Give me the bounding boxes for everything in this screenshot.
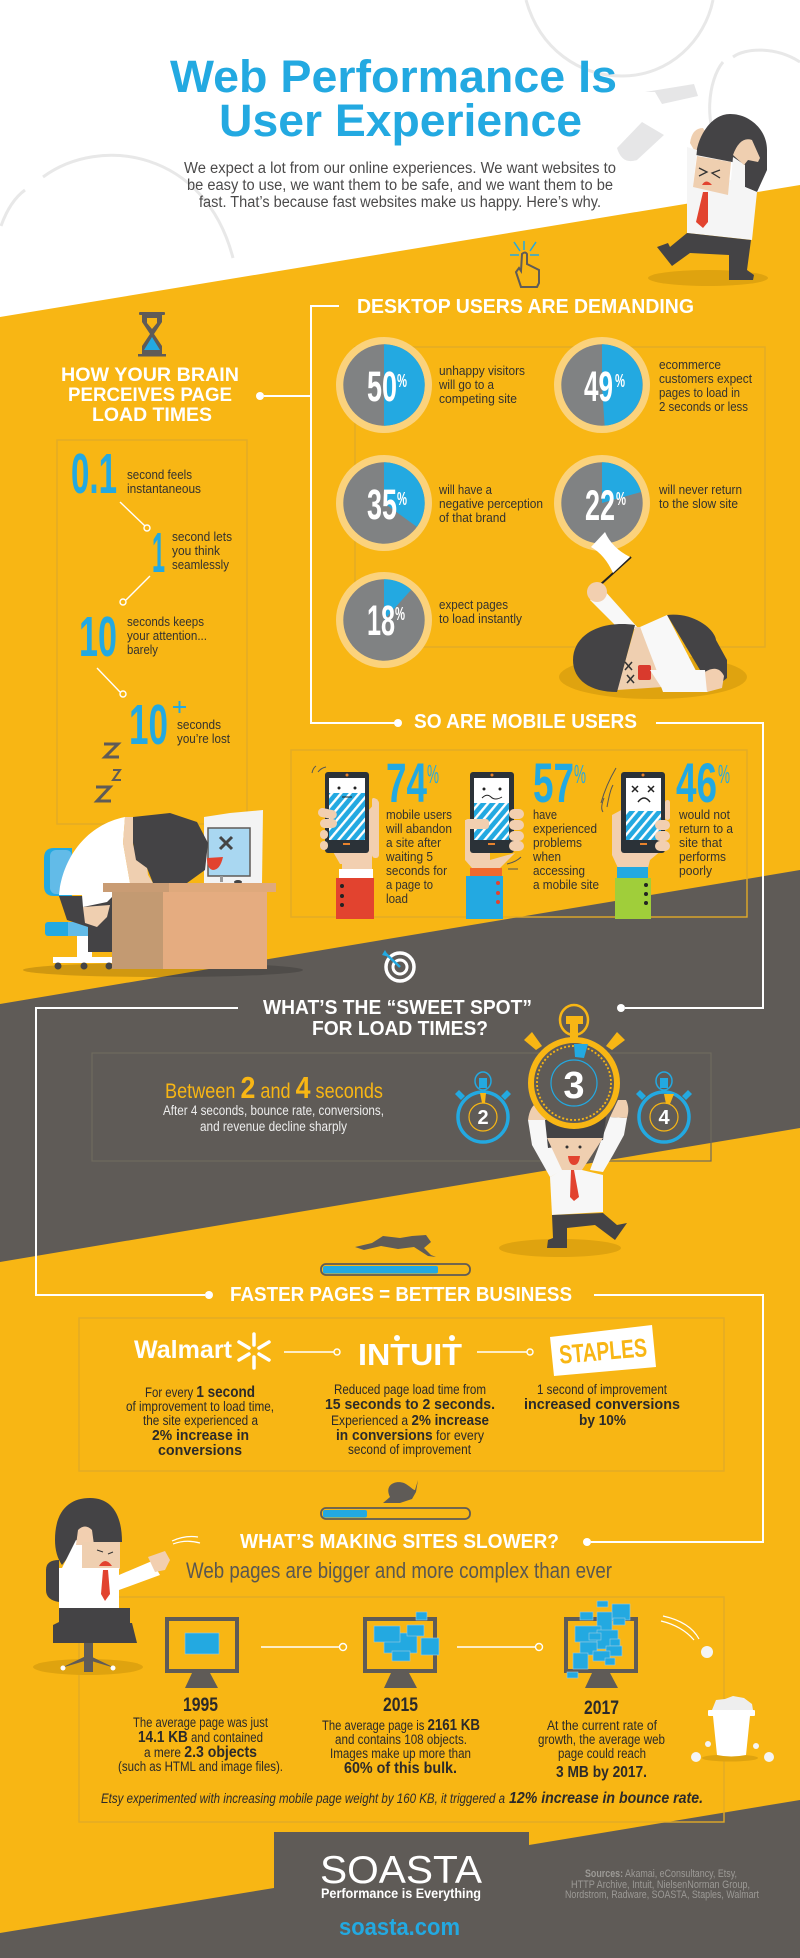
stat: 35 percent: negative perception	[439, 496, 543, 511]
icon: stopwatch 4	[636, 1072, 692, 1142]
text: Etsy note: 12% increase in bounce rate.	[509, 1790, 703, 1807]
callout: between 2 and 4 seconds: Between 2 and 4 seconds	[165, 1070, 383, 1105]
logo: Staples	[550, 1325, 656, 1376]
text: Etsy note: Etsy experimented with increasing mobile page weight by 160 KB, it triggered a	[101, 1791, 505, 1806]
text: after 4 seconds: After 4 seconds, bounce rate, conversions,	[163, 1103, 384, 1118]
stat: 46 percent: would not	[678, 808, 730, 822]
stat: 57 percent: experienced	[533, 822, 597, 836]
stat: 57 percent: problems	[533, 836, 582, 850]
logo: Walmart	[134, 1334, 340, 1368]
stat: 49 percent	[554, 337, 752, 433]
stat: 49 percent: ecommerce	[659, 357, 721, 372]
stat: 74 percent: load	[386, 892, 408, 906]
heading: how your brain perceives: HOW YOUR BRAIN	[61, 365, 239, 386]
text: 2015 details: 60% of this bulk.	[344, 1760, 457, 1777]
icon: stopwatch 2: 2	[477, 1107, 489, 1129]
logo: Intuit: INTUIT	[358, 1337, 462, 1372]
icon: clicking hand	[510, 241, 539, 287]
stat: 35 percent: of that brand	[439, 510, 506, 525]
connector lines	[36, 306, 763, 1546]
stat: 35 percent: %	[397, 489, 407, 509]
heading: sweet spot	[263, 997, 532, 1040]
panel: load time perception	[57, 440, 247, 824]
heading: so are mobile users: SO ARE MOBILE USERS	[414, 711, 637, 733]
character: man holding stopwatch	[499, 1100, 628, 1257]
stat: 50 percent: will go to a	[438, 377, 495, 392]
panel: desktop stats	[336, 337, 765, 668]
stat: 57 percent	[532, 751, 599, 892]
stat: 57 percent: 57	[533, 751, 574, 814]
heading: how your brain perceives	[61, 365, 239, 426]
text: 1995 details	[118, 1715, 283, 1774]
text: Intuit result: in conversions for every	[336, 1427, 484, 1444]
text: 1995 details: The average page was just	[133, 1715, 268, 1730]
stat: 0.1 second: second feels	[127, 467, 192, 482]
text: Walmart result: For every 1 second	[145, 1384, 255, 1401]
stat: 74 percent: %	[427, 759, 439, 789]
stat: 10 seconds: 10	[79, 605, 117, 669]
stat: 35 percent	[336, 455, 543, 551]
heading: what's making sites slower: WHAT’S MAKING SITES SLOWER?	[240, 1531, 559, 1553]
decorative arcs and paper	[1, 0, 800, 258]
stat: 22 percent: to the slow site	[659, 496, 738, 511]
heading: how your brain perceives: PERCEIVES PAGE	[68, 385, 232, 406]
stat: 74 percent: will abandon	[385, 822, 452, 836]
text: 2015 details: Images make up more than	[330, 1746, 471, 1761]
stat: 49 percent: pages to load in	[659, 385, 740, 400]
phone: user 2	[465, 772, 524, 919]
stat: 57 percent: have	[533, 808, 557, 822]
stat: 46 percent	[676, 751, 733, 878]
stat: 49 percent: 2 seconds or less	[659, 399, 748, 414]
icon: stopwatch 4: 4	[658, 1107, 670, 1129]
monitor: 1995	[167, 1619, 237, 1688]
intro text: We expect a lot from our online experiences. We want websites to	[184, 160, 616, 177]
heading: faster pages: FASTER PAGES = BETTER BUSINESS	[230, 1284, 572, 1306]
text: 2015 details: and contains 108 objects.	[335, 1732, 467, 1747]
intro text: fast. That’s because fast websites make us happy. Here’s why.	[199, 194, 601, 211]
text: 1995 details: a mere 2.3 objects	[144, 1744, 257, 1761]
text: after 4 seconds: and revenue decline sharply	[200, 1119, 347, 1134]
stat: 46 percent: 46	[676, 751, 717, 814]
text: Staples result: 1 second of improvement	[537, 1382, 667, 1397]
sources: HTTP Archive, Intuit, NielsenNorman Group,	[571, 1879, 750, 1891]
text: Intuit result	[325, 1382, 495, 1457]
character: frustrated businessman	[648, 114, 768, 286]
stat: 10+ seconds	[129, 693, 230, 757]
stat: 46 percent: poorly	[679, 864, 713, 878]
stat: 18 percent	[336, 572, 522, 668]
stat: 10 seconds: your attention...	[127, 628, 207, 643]
stat: 46 percent: return to a	[679, 822, 733, 836]
text: 2017 details: page could reach	[558, 1746, 646, 1761]
text: 2015 details	[322, 1717, 480, 1777]
stat: 49 percent: 49	[584, 363, 613, 411]
stat: 10+ seconds: 10	[129, 693, 168, 757]
text: 1995 details: 14.1 KB and contained	[138, 1729, 263, 1746]
text: Staples result	[524, 1382, 680, 1429]
icon: hourglass	[138, 312, 166, 356]
stat: 1 second: seamlessly	[172, 557, 229, 572]
subheading: web pages bigger: Web pages are bigger and more complex than ever	[186, 1558, 612, 1583]
stat: 10+ seconds: you’re lost	[177, 731, 230, 746]
stat: 10 seconds	[79, 605, 207, 697]
logo: SOASTA: SOASTA	[320, 1849, 482, 1892]
stat: 22 percent: 22	[585, 482, 615, 530]
year: 2015: 2015	[383, 1695, 418, 1716]
text: 2017 details: growth, the average web	[538, 1732, 665, 1747]
stat: 74 percent: 74	[386, 751, 427, 814]
stat: 35 percent: 35	[367, 481, 397, 529]
text: Staples result: by 10%	[579, 1412, 626, 1429]
stat: 49 percent: %	[615, 371, 625, 391]
stat: 50 percent: unhappy visitors	[439, 363, 525, 378]
stat: 18 percent: expect pages	[439, 597, 508, 612]
monitor: 2015	[365, 1612, 439, 1688]
text: Intuit result: Experienced a 2% increase	[331, 1412, 489, 1429]
icon: large stopwatch 3: 3	[563, 1065, 585, 1107]
logo: Staples: STAPLES	[558, 1332, 648, 1370]
logo: Walmart: Walmart	[134, 1336, 233, 1364]
text: Walmart result: of improvement to load time,	[126, 1399, 274, 1414]
stat: 50 percent	[336, 337, 525, 433]
icon: target with dart	[382, 950, 414, 981]
progress bar: fast	[321, 1264, 470, 1275]
text: Intuit result: Reduced page load time from	[334, 1382, 486, 1397]
character: worried office worker	[33, 1498, 200, 1675]
heading: how your brain perceives: LOAD TIMES	[92, 405, 212, 426]
monitor: 2017	[566, 1601, 636, 1688]
text: Intuit result: 15 seconds to 2 seconds.	[325, 1396, 495, 1413]
stat: 1 second: you think	[172, 543, 220, 558]
text: 2017 details: At the current rate of	[547, 1718, 657, 1733]
text: Walmart result: 2% increase in	[152, 1427, 249, 1444]
title	[170, 51, 617, 146]
stat: 74 percent: a site after	[386, 836, 441, 850]
title: Web Performance Is	[170, 51, 617, 102]
panel: better business	[79, 1318, 724, 1471]
stat: 10 seconds: barely	[127, 642, 158, 657]
intro text: be easy to use, we want them to be safe, and we want them to be	[187, 177, 613, 194]
stat: 0.1 second: 0.1	[71, 442, 117, 506]
year: 1995: 1995	[183, 1695, 218, 1716]
character: sleeping at desk	[23, 810, 303, 977]
illustration: crumpled paper and bin	[661, 1616, 774, 1762]
stat: 74 percent: mobile users	[386, 808, 452, 822]
stat: 22 percent	[554, 455, 742, 551]
stat: 46 percent: site that	[679, 836, 723, 850]
stat: 0.1 second	[71, 442, 201, 531]
link: soasta.com: soasta.com	[339, 1914, 460, 1941]
stat: 1 second: 1	[152, 521, 165, 585]
phone: user 1	[312, 766, 379, 919]
stat: 74 percent: seconds for	[386, 864, 447, 878]
stat: 46 percent: %	[718, 759, 730, 789]
stat: 57 percent: a mobile site	[533, 878, 599, 892]
text: 2015 details: The average page is 2161 KB	[322, 1717, 480, 1734]
stat: 57 percent: when	[532, 850, 561, 864]
text: Walmart result: the site experienced a	[143, 1413, 258, 1428]
icon: stopwatch 2	[455, 1072, 511, 1142]
text: after 4 seconds	[163, 1103, 384, 1134]
intro text	[184, 160, 616, 211]
text: Walmart result: conversions	[158, 1442, 242, 1459]
stat: 46 percent: performs	[679, 850, 726, 864]
text: Intuit result: second of improvement	[348, 1442, 471, 1457]
phone: user 3	[601, 768, 670, 919]
stat: 57 percent: accessing	[533, 864, 585, 878]
panel: mobile stats	[291, 750, 747, 919]
panel: page growth	[79, 1597, 724, 1822]
icon: sleep z letters	[96, 744, 121, 801]
stat: 22 percent: will never return	[658, 482, 742, 497]
year: 2017: 2017	[584, 1698, 619, 1719]
heading: desktop users: DESKTOP USERS ARE DEMANDING	[357, 296, 694, 318]
text: Etsy note	[101, 1790, 703, 1807]
logo: SOASTA: Performance is Everything	[321, 1885, 481, 1901]
stat: 22 percent: %	[616, 489, 626, 509]
stat: 50 percent: competing site	[439, 391, 517, 406]
stat: 74 percent: waiting 5	[385, 850, 433, 864]
sources: Sources: Akamai, eConsultancy, Etsy,	[585, 1868, 737, 1880]
progress bar: slow	[321, 1508, 470, 1519]
stat: 74 percent	[385, 751, 452, 906]
icon: large stopwatch 3	[524, 1005, 625, 1126]
stat: 74 percent: a page to	[386, 878, 433, 892]
stat: 50 percent: 50	[367, 363, 397, 411]
text: 1995 details: (such as HTML and image files).	[118, 1759, 283, 1774]
stat: 1 second	[120, 521, 232, 605]
stat: 50 percent: %	[397, 371, 407, 391]
stat: 18 percent: to load instantly	[439, 611, 522, 626]
heading: sweet spot: FOR LOAD TIMES?	[312, 1018, 488, 1040]
stat: 49 percent: customers expect	[659, 371, 752, 386]
text: 2017 details	[538, 1718, 665, 1781]
text: Staples result: increased conversions	[524, 1396, 680, 1413]
logo: Intuit	[358, 1335, 533, 1372]
stat: 57 percent: %	[574, 759, 586, 789]
stat: 10 seconds: seconds keeps	[127, 614, 204, 629]
character: collapsed with white flag	[559, 532, 747, 699]
sources	[565, 1868, 759, 1901]
sources: Nordstrom, Radware, SOASTA, Staples, Walmart	[565, 1889, 759, 1901]
icon: cheetah	[355, 1235, 436, 1257]
panel: sweet spot	[92, 1053, 711, 1161]
title: User Experience	[219, 95, 582, 146]
stat: 35 percent: will have a	[438, 482, 493, 497]
text: 2017 details: 3 MB by 2017.	[556, 1764, 647, 1781]
icon: snail	[383, 1480, 418, 1503]
stat: 1 second: second lets	[172, 529, 232, 544]
text: Walmart result	[126, 1384, 274, 1459]
stat: 0.1 second: instantaneous	[127, 481, 201, 496]
heading: sweet spot: WHAT’S THE “SWEET SPOT”	[263, 997, 532, 1019]
stat: 18 percent: 18	[367, 597, 395, 645]
stat: 10+ seconds: seconds	[177, 717, 221, 732]
stat: 18 percent: %	[395, 604, 405, 624]
